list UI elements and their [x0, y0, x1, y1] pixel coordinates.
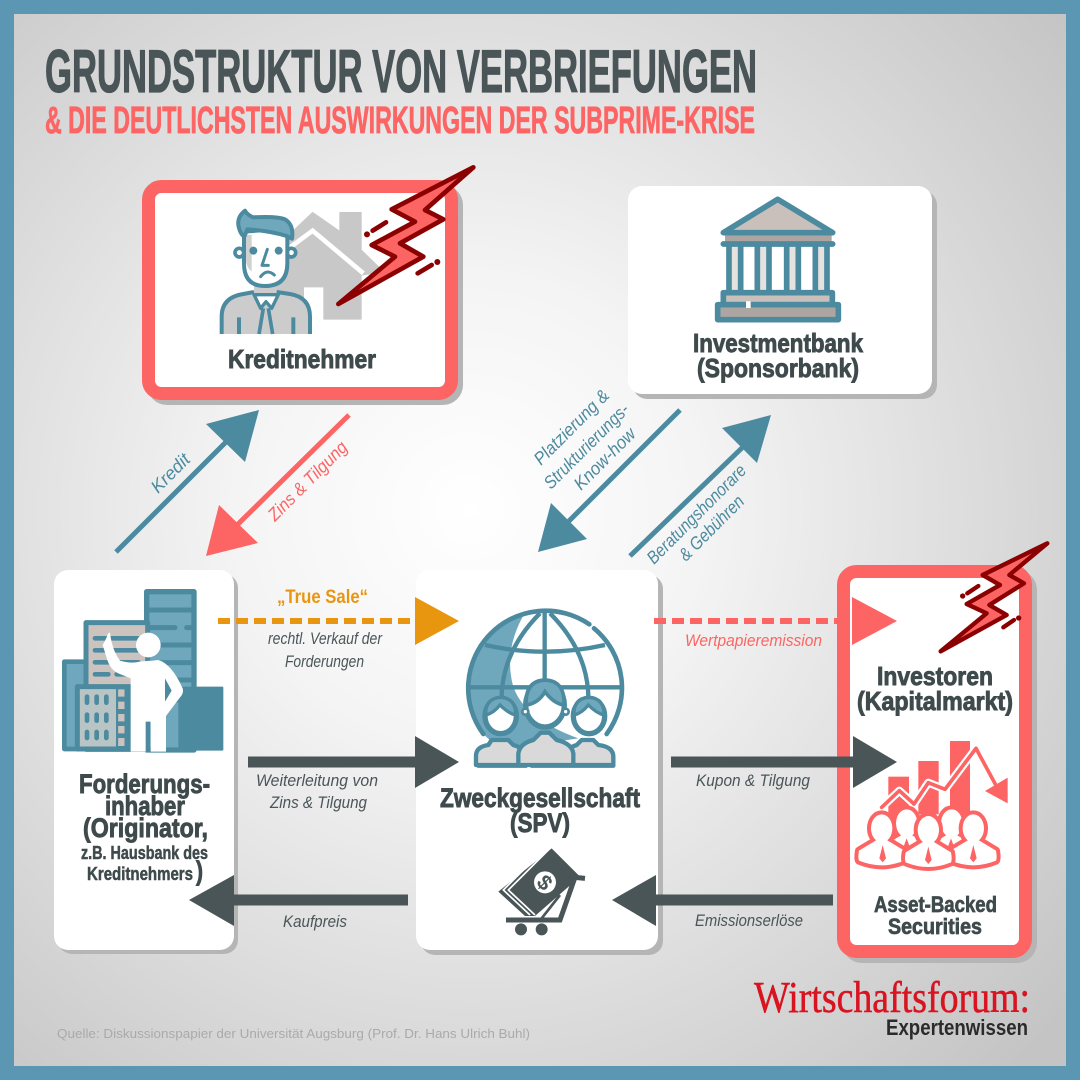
arrow: True Sale: rechtl. Verkauf der	[268, 629, 383, 648]
icon: money cart: $	[532, 870, 557, 896]
title	[45, 38, 757, 142]
label: Investmentbank: Investmentbank	[693, 328, 863, 358]
arrow: Weiterleitung: Weiterleitung von	[256, 771, 378, 790]
label: Zweckgesellschaft: (SPV)	[510, 808, 570, 838]
panel: Investmentbank	[628, 186, 937, 399]
label: Zweckgesellschaft: Zweckgesellschaft	[440, 783, 640, 813]
label: Investoren: Investoren	[877, 661, 993, 691]
label: Asset-Backed Securities	[874, 892, 997, 939]
arrow: Beratungshonorare: & Gebühren	[675, 491, 748, 565]
logo: Wirtschaftsforum	[754, 973, 1030, 1040]
label: Forderungsinhaber: Kreditnehmers	[87, 864, 193, 884]
label: Asset-Backed Securities: Securities	[888, 914, 982, 939]
label: Asset-Backed Securities: Asset-Backed	[874, 892, 997, 917]
label: Investmentbank	[693, 328, 863, 383]
arrow: Kaufpreis: Kaufpreis	[283, 912, 347, 931]
arrow: Emissionserlöse	[612, 875, 833, 930]
arrow: Beratungshonorare: Beratungshonorare	[643, 460, 750, 568]
icon: falling chart with investors	[858, 741, 1008, 867]
arrow: Zins & Tilgung	[206, 415, 351, 556]
arrow: True Sale: Forderungen	[285, 652, 364, 671]
label: Zweckgesellschaft	[440, 783, 640, 838]
logo: Wirtschaftsforum: Expertenwissen	[886, 1015, 1028, 1040]
arrow: Platzierung	[530, 385, 680, 552]
arrow: Platzierung: Strukturierungs-	[540, 399, 633, 493]
logo: Wirtschaftsforum: Wirtschaftsforum:	[754, 973, 1030, 1022]
arrow: Weiterleitung: Zins & Tilgung	[269, 793, 367, 812]
arrow: Kaufpreis	[189, 875, 408, 931]
panel: Forderungsinhaber	[54, 570, 238, 954]
arrow: Platzierung: Platzierung &	[530, 385, 613, 469]
label: Investoren: (Kapitalmarkt)	[857, 686, 1013, 716]
label: Forderungsinhaber: inhaber	[105, 791, 185, 821]
arrow: Kredit: Kredit	[147, 449, 195, 497]
icon: buildings and person	[64, 592, 223, 752]
arrow: Kupon & Tilgung: Kupon & Tilgung	[696, 771, 810, 790]
label: Forderungsinhaber	[79, 769, 210, 886]
label: Forderungsinhaber: )	[196, 856, 203, 886]
icon: borrower with house	[222, 211, 383, 334]
icon: bank building	[718, 199, 838, 320]
arrow: Platzierung: Know-how	[570, 423, 640, 494]
arrow: True Sale: „True Sale“	[277, 587, 368, 608]
panel: Investoren	[842, 543, 1047, 963]
label: Investmentbank: (Sponsorbank)	[697, 353, 859, 383]
icon: lightning bolt	[338, 167, 473, 304]
label: Forderungsinhaber: (Originator,	[83, 813, 208, 843]
arrow: Weiterleitung	[248, 736, 459, 812]
icon: globe with people	[467, 611, 622, 766]
icon: lightning bolt	[941, 543, 1047, 651]
panel: Zweckgesellschaft	[416, 570, 663, 955]
label: Investoren	[857, 661, 1013, 716]
arrow: Zins & Tilgung: Zins & Tilgung	[263, 437, 351, 525]
source note: Quelle: Diskussionspapier der Universität Augsburg (Prof. Dr. Hans Ulrich Buhl)	[57, 1026, 530, 1041]
arrow: Emissionserlöse: Emissionserlöse	[695, 911, 803, 930]
arrow: Kredit	[116, 410, 259, 552]
icon: money cart	[498, 848, 585, 935]
arrow: True Sale	[218, 587, 459, 671]
label: Kreditnehmer: Kreditnehmer	[228, 344, 376, 374]
arrow: Wertpapieremission: Wertpapieremission	[685, 631, 822, 650]
label: Forderungsinhaber: Forderungs-	[79, 769, 210, 799]
arrow: Wertpapieremission	[654, 597, 897, 650]
arrow: Kupon & Tilgung	[671, 736, 897, 790]
label: Forderungsinhaber: z.B. Hausbank des	[81, 843, 208, 863]
panel: Kreditnehmer	[147, 167, 473, 405]
